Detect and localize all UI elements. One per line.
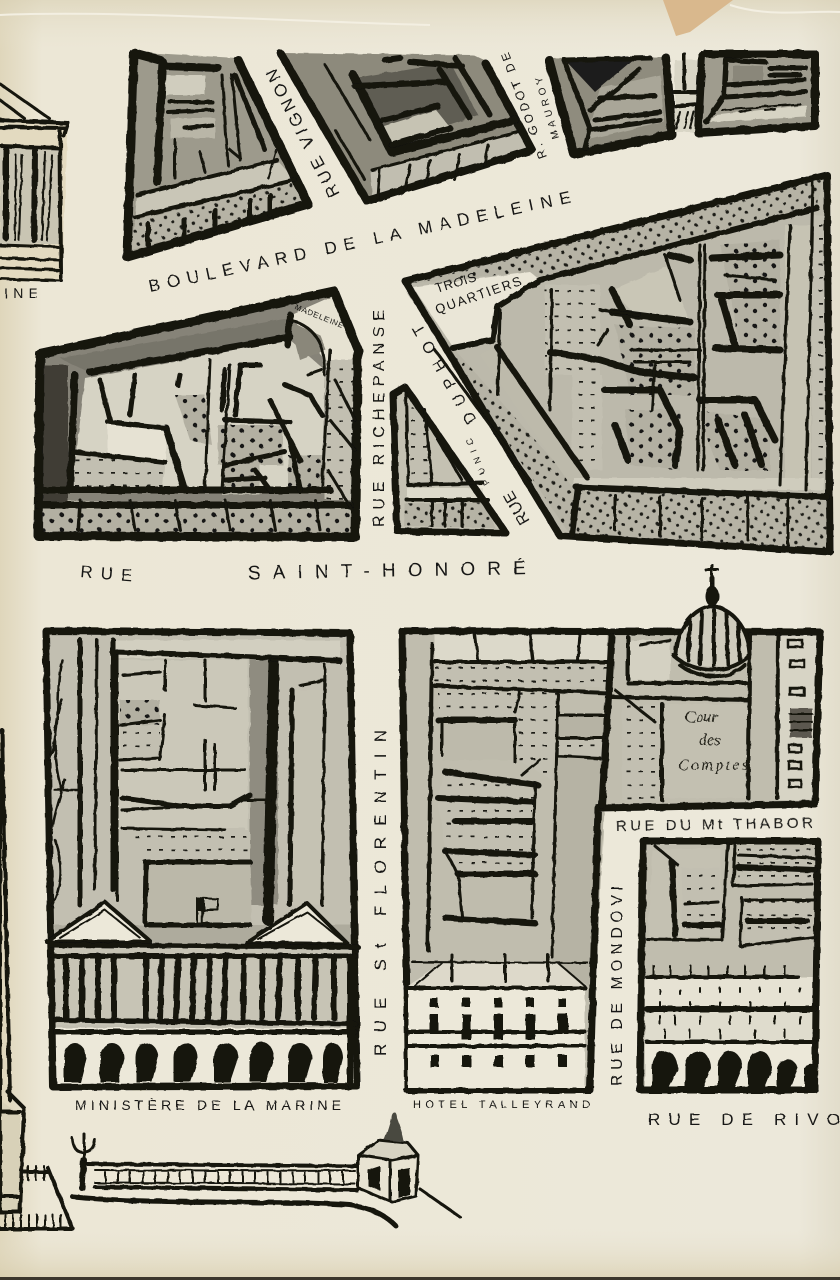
courtyard building roofs	[545, 215, 826, 495]
right pediment	[247, 903, 348, 944]
label: Boulevard de la Madeleine: BOULEVARD DE LA MADELEINE	[147, 188, 572, 296]
label: Mauroy: MAUROY	[534, 75, 562, 140]
colonnade	[55, 945, 355, 1025]
panel: block south of rue du Mont Thabor	[640, 841, 818, 1090]
panel: block east of rue Godot de Mauroy	[547, 57, 672, 155]
terrace balustrade with statue	[72, 1134, 396, 1226]
white corner of the Trois Quartiers store	[413, 272, 540, 347]
handwritten label: Cour des Comptes: Comptes	[678, 757, 748, 774]
diagonal street-front range	[405, 290, 577, 535]
dome of the Assumption	[673, 565, 750, 676]
street-front band along the boulevard	[413, 180, 822, 283]
panel: Ministère de la Marine block	[45, 630, 358, 1087]
label: Punic: PUNIC	[464, 436, 492, 487]
panel: small triangular block	[392, 387, 507, 533]
panel: block between Madeleine and rue Richepanse	[37, 290, 360, 538]
panel: block between rue Vignon and rue Godot de Mauroy	[280, 53, 533, 202]
label: Rue Vignon: RUE VIGNON	[262, 66, 344, 201]
label: Rue de Rivoli: RUE DE RIVO	[648, 1110, 840, 1129]
panel: narrow passage between eastern blocks	[674, 54, 700, 132]
ground-floor arches	[64, 1042, 343, 1082]
colonnade columns	[50, 945, 358, 1085]
panel: block north of boulevard, west of rue Vignon	[127, 52, 308, 258]
label: Madeleine corner: MADELEINE	[293, 303, 345, 330]
label: Saint-Honoré: SAINT-HONORÉ	[248, 558, 526, 584]
label: Rue Saint-Florentin: RUE St FLORENTIN	[371, 730, 390, 1056]
Hôtel Talleyrand facade	[405, 955, 590, 1090]
label: Ministère de la Marine: MINISTÈRE DE LA MARINE	[75, 1097, 341, 1113]
label: Duphot: DUPHOT	[410, 321, 480, 426]
central roof and court	[122, 828, 250, 862]
ground-floor arches	[652, 1051, 816, 1088]
flag on the ministry court	[197, 898, 218, 924]
label: Rue Godot de: R. GODOT DE	[498, 51, 550, 161]
garden pavilion with statue	[358, 1112, 460, 1217]
label: Trois: TROIS	[433, 269, 478, 296]
label: Rue du Mont Thabor: RUE DU Mt THABOR	[616, 815, 813, 835]
ground-floor band	[572, 490, 830, 552]
courtyard shaded columns	[250, 660, 278, 905]
label: Rue (Saint-Honoré): RUE	[80, 562, 133, 586]
handwritten label: Cour des Comptes	[678, 709, 748, 774]
Cour des Comptes wing windows	[788, 640, 812, 787]
left pediment	[47, 902, 150, 942]
label: Rue: RUE	[501, 488, 533, 528]
label: Rue Richepanse: RUE RICHEPANSE	[371, 310, 388, 527]
label: Rue de Mondovi: RUE DE MONDOVI	[609, 886, 626, 1086]
label: Quartiers: QUARTIERS	[433, 273, 523, 317]
panel: Trois Quartiers block	[403, 175, 830, 553]
handwritten label: Cour des Comptes: des	[699, 732, 720, 749]
label: Hôtel Talleyrand: HOTEL TALLEYRAND	[413, 1099, 590, 1111]
obelisk and fence, bottom left	[0, 730, 73, 1229]
label: Madeleine fragment: INE	[4, 285, 38, 301]
panel: temple of la Madeleine, left edge	[0, 84, 68, 281]
handwritten label: Cour des Comptes: Cour	[685, 709, 719, 726]
panel: north-east corner block	[698, 52, 815, 133]
panel: Cour des Comptes and Hôtel Talleyrand block	[402, 565, 820, 1090]
